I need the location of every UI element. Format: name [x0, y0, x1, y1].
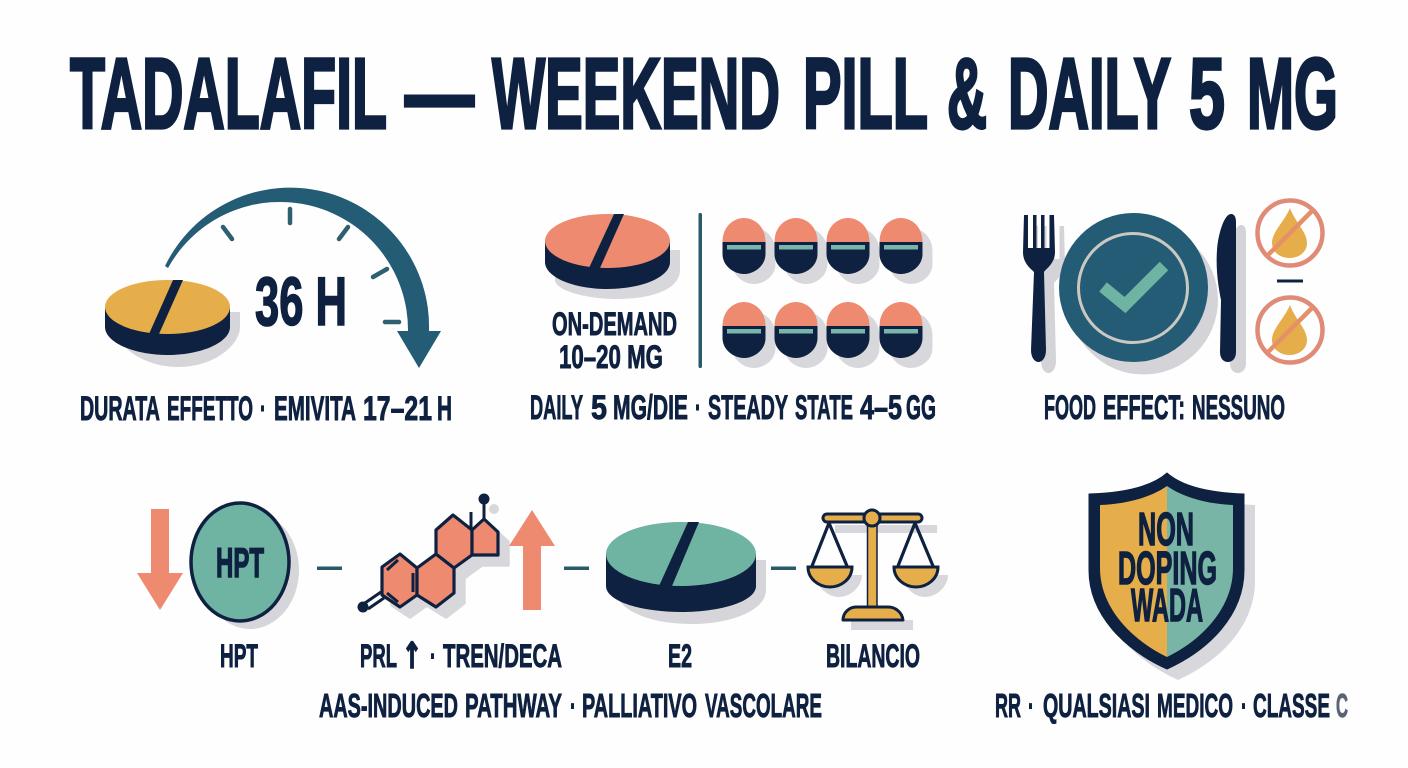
- label: E2: E2: [668, 638, 692, 674]
- icon: no fat drop bottom: [1258, 298, 1322, 362]
- title: PILL: [803, 38, 928, 150]
- arrow: down: [137, 509, 183, 610]
- dosing label: 5: [591, 389, 607, 427]
- dosing label: 4–5: [860, 389, 902, 427]
- icon: coral on-demand pill: [545, 214, 680, 299]
- icon: steroid molecule: [358, 494, 508, 617]
- prescription label: ·: [1028, 687, 1034, 724]
- arrow: up: [509, 510, 555, 610]
- icon: plate with check: [1059, 213, 1218, 374]
- icon: teal pill: [606, 522, 766, 624]
- pathway caption: VASCOLARE: [705, 687, 822, 724]
- vertical divider: [698, 213, 702, 368]
- icon: shield: [1089, 473, 1255, 680]
- prescription label: RR: [995, 687, 1021, 724]
- title: TADALAFIL: [70, 38, 387, 150]
- gauge ticks: [223, 209, 399, 322]
- pathway caption: PALLIATIVO: [582, 687, 697, 724]
- on-demand label: ON-DEMAND: [552, 306, 677, 342]
- label: PRL: [360, 636, 562, 677]
- dosing label: DAILY: [530, 389, 583, 427]
- label: PRL: TREN/DECA: [443, 638, 562, 674]
- label: PRL: ↑: [402, 636, 422, 677]
- duration label: [80, 390, 452, 428]
- dosing label: ·: [695, 389, 701, 427]
- title: 5: [1189, 38, 1225, 150]
- icon: HPT circle: HPT: [216, 539, 264, 586]
- panel: duration: [80, 188, 452, 428]
- prescription label: QUALSIASI: [1043, 687, 1150, 724]
- icon: shield: WADA: [1131, 579, 1203, 631]
- panel: dosing: [530, 213, 936, 427]
- title: &: [947, 38, 987, 150]
- pathway caption: ·: [570, 687, 576, 724]
- pathway caption: [319, 687, 822, 724]
- label: bilancio: BILANCIO: [826, 638, 920, 674]
- duration label: EFFETTO: [167, 390, 253, 428]
- duration label: H: [437, 390, 452, 428]
- connector dash: [771, 566, 796, 570]
- panel: anti-doping: [995, 473, 1348, 724]
- prescription label: C: [1336, 687, 1348, 724]
- dosing label: STEADY: [708, 389, 788, 427]
- dosing label: [530, 389, 936, 427]
- icon: balance scales: [808, 510, 948, 630]
- duration value: 36 H: [255, 263, 347, 340]
- icon: no fat drop top: [1258, 200, 1322, 266]
- prescription label: MEDICO: [1157, 687, 1233, 724]
- label: PRL: PRL: [360, 638, 397, 674]
- title: WEEKEND: [492, 38, 780, 150]
- food label: [1044, 389, 1285, 427]
- duration label: EMIVITA: [274, 390, 356, 428]
- icon: shield: NON: [1138, 503, 1194, 555]
- dosing label: MG/DIE: [613, 389, 688, 427]
- title: —: [405, 38, 474, 150]
- prescription label: [995, 687, 1348, 724]
- daily pill grid: [722, 218, 932, 368]
- arc arrow: [165, 188, 441, 368]
- panel: pathway: [137, 494, 948, 724]
- title: DAILY: [1008, 38, 1171, 150]
- panel: food effect: [1023, 200, 1322, 427]
- duration label: DURATA: [80, 390, 160, 428]
- title: MG: [1247, 38, 1338, 150]
- duration label: ·: [260, 390, 266, 428]
- dosing label: GG: [906, 389, 936, 427]
- duration label: 17–21: [363, 390, 432, 428]
- prescription label: ·: [1241, 687, 1247, 724]
- label: PRL: ·: [430, 638, 436, 674]
- food label: EFFECT:: [1103, 389, 1185, 427]
- dosing label: STATE: [795, 389, 853, 427]
- icon: knife: [1217, 214, 1246, 373]
- label: HPT: HPT: [220, 638, 258, 674]
- title: [70, 38, 1338, 150]
- minus dash: [1277, 280, 1303, 282]
- prescription label: CLASSE: [1253, 687, 1330, 724]
- icon: HPT circle: [191, 503, 299, 629]
- icon: yellow pill: [105, 280, 240, 367]
- on-demand dose: 10–20 MG: [559, 339, 663, 375]
- food label: FOOD: [1044, 389, 1096, 427]
- icon: shield: DOPING: [1118, 542, 1217, 594]
- connector dash: [564, 566, 589, 570]
- pathway caption: AAS-INDUCED: [319, 687, 458, 724]
- pathway caption: PATHWAY: [465, 687, 562, 724]
- icon: fork: [1023, 215, 1065, 373]
- food label: NESSUNO: [1192, 389, 1285, 427]
- connector dash: [317, 566, 342, 570]
